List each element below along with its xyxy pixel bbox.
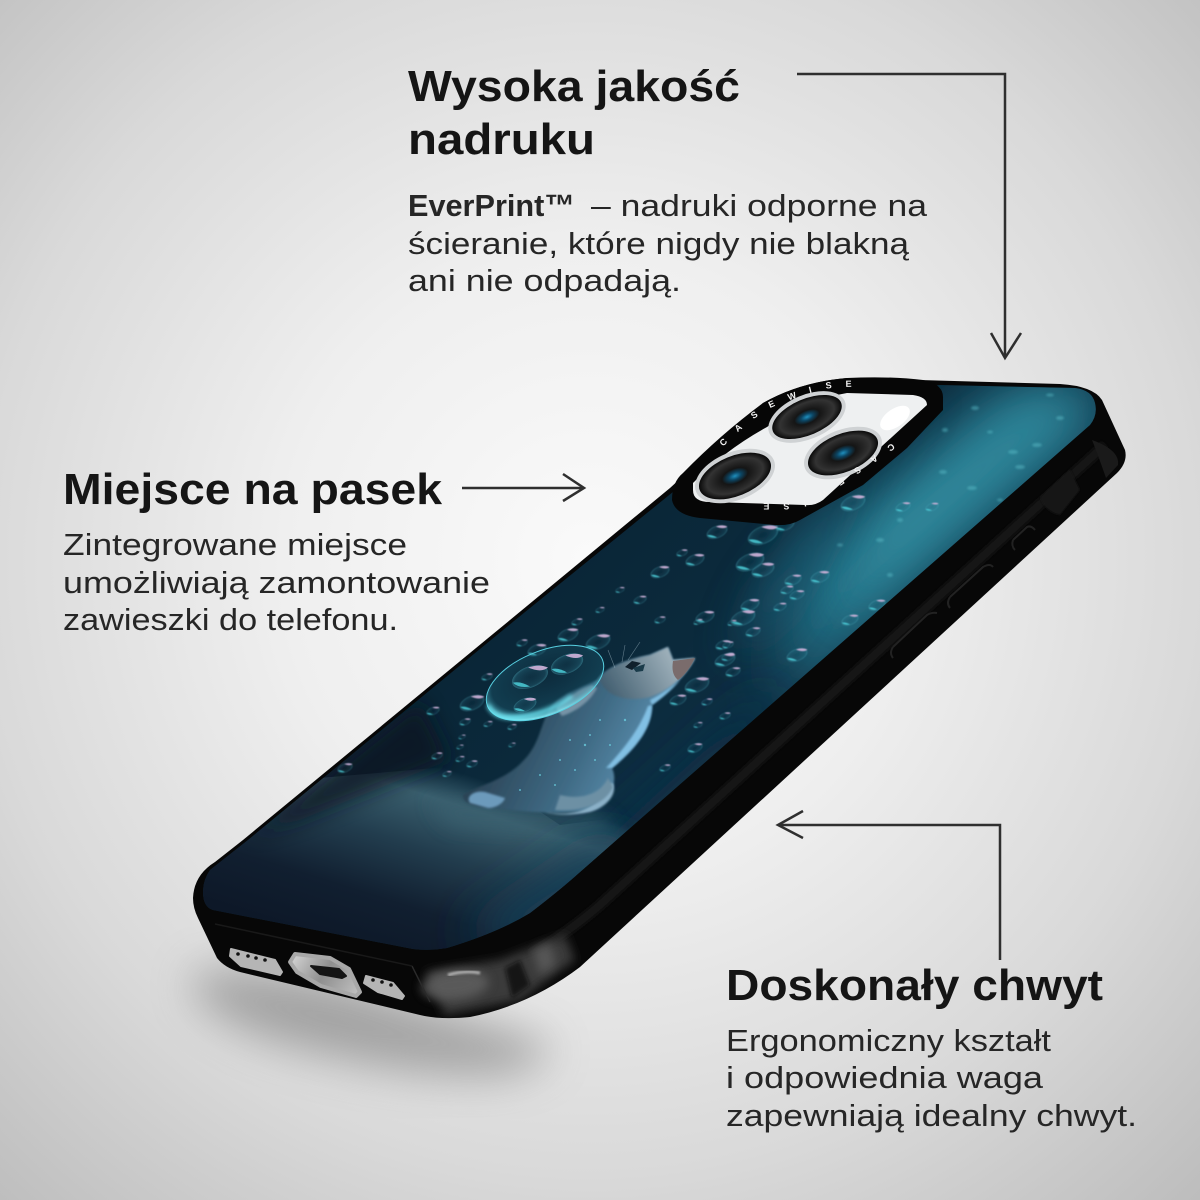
camera plate bbox=[693, 393, 927, 505]
text block: strap slot: Zintegrowane miejsce bbox=[63, 527, 407, 562]
text block: print quality: ścieranie, które nigdy nie blakną bbox=[408, 226, 910, 261]
charging port bbox=[290, 954, 360, 996]
side buttons bbox=[891, 469, 1080, 658]
lens top bbox=[761, 381, 853, 453]
text block: strap slot: umożliwiają zamontowanie bbox=[63, 565, 490, 600]
ring lettering: CASEWISE bbox=[720, 380, 852, 446]
case body bbox=[193, 378, 1126, 1018]
text block: strap slot: zawieszki do telefonu. bbox=[63, 602, 398, 637]
text block: strap slot bbox=[63, 527, 490, 637]
arrow: print quality bbox=[797, 74, 1021, 358]
arrow: grip bbox=[778, 811, 1000, 960]
phone in case bbox=[193, 377, 1126, 1018]
heading: print quality: nadruku bbox=[408, 115, 595, 164]
large soap bubble bbox=[484, 644, 604, 723]
case side highlights bbox=[215, 440, 1118, 1015]
lens left bbox=[687, 438, 783, 514]
heading: print quality: Wysoka jakość bbox=[408, 62, 740, 111]
faint teal dots bbox=[837, 394, 1064, 577]
lens right bbox=[796, 416, 890, 490]
text block: grip: zapewniają idealny chwyt. bbox=[726, 1098, 1137, 1133]
heading: grip: Doskonały chwyt bbox=[726, 961, 1103, 1010]
heading: strap slot: Miejsce na pasek bbox=[63, 465, 443, 514]
text block: grip: Ergonomiczny kształt bbox=[726, 1023, 1051, 1058]
text block: print quality bbox=[408, 188, 928, 298]
text block: grip bbox=[726, 1023, 1137, 1133]
speaker grille right bbox=[364, 976, 404, 999]
phone drop shadow bbox=[193, 969, 549, 1076]
cat bbox=[463, 642, 695, 815]
camera ring bbox=[672, 377, 943, 526]
arrow: strap slot bbox=[462, 474, 584, 501]
ring lettering bbox=[720, 380, 894, 510]
text block: print quality: – nadruki odporne na bbox=[591, 188, 928, 223]
text block: grip: i odpowiednia waga bbox=[726, 1060, 1044, 1095]
printed artwork on back bbox=[203, 385, 1096, 950]
speaker grille left bbox=[230, 949, 282, 975]
ring lettering: CASEWISE bbox=[764, 444, 894, 510]
heading: print quality bbox=[408, 62, 740, 164]
text block: print quality: EverPrint™ bbox=[408, 188, 575, 223]
artwork glow bbox=[180, 385, 1100, 970]
bubbles bbox=[336, 492, 940, 778]
text block: print quality: ani nie odpadają. bbox=[408, 263, 681, 298]
flash bbox=[876, 401, 914, 435]
